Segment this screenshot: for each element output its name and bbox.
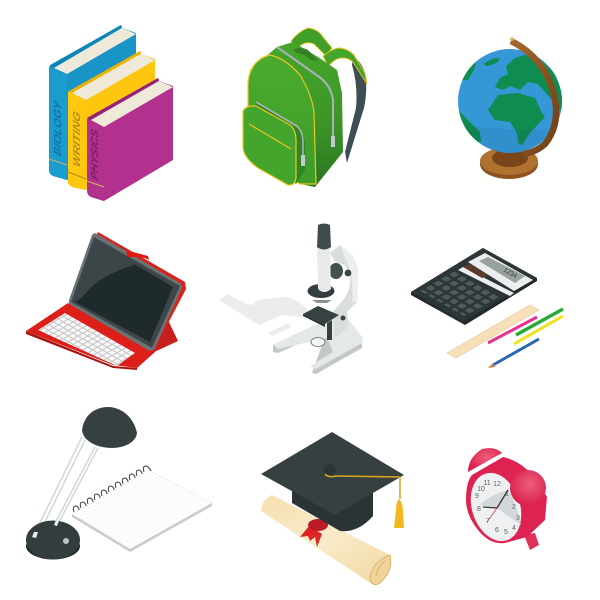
tablet body [69,233,182,351]
spine label: PHYSICS: PHYSICS [90,127,101,182]
revolving nosepiece [308,284,334,298]
blue book [49,25,136,180]
continents [456,55,563,145]
clock face: 11 [483,480,491,487]
purple book [87,78,173,201]
icon: alarm clock [462,448,547,550]
cap board [261,432,404,515]
red keyboard base [26,303,155,368]
clock face: 7 [486,518,490,525]
clock face [462,466,530,548]
clock face: 10 [477,486,485,493]
icon: ruler [447,305,539,358]
arm [330,245,358,338]
notebook spiral [73,466,151,512]
clock face: 1 [505,491,509,498]
clock body [466,457,547,543]
dark back strap [345,56,366,163]
icon: tablet with red keyboard case [26,232,186,370]
spine label: WRITING: WRITING [72,109,83,169]
icon: yellow pencil [514,316,563,344]
yellow book [68,51,155,190]
eyepiece [317,224,331,250]
globe shading [464,126,553,153]
base [273,315,363,374]
clock face: 9 [475,493,479,500]
spine label: BIOLOGY: BIOLOGY [53,98,64,158]
stage [303,306,339,324]
top handle [293,48,318,61]
small bell [468,448,502,472]
icon: globe [456,37,563,179]
top straps [291,28,332,56]
clock face: 4 [512,525,516,532]
lamp button [63,538,69,544]
icon: green pencil [516,309,563,335]
clock hands [483,490,508,508]
big bell [510,470,546,506]
stand flap [140,320,178,353]
lamp base [26,520,80,560]
mirror [311,338,325,346]
tassel cord [325,474,400,499]
clock face: 5 [504,529,508,536]
front panel [248,55,316,184]
microscope shadow [219,294,312,325]
tassel [394,499,404,528]
calculator digits: 1234 [502,267,518,280]
front pocket [243,102,305,185]
clock face: 2 [512,504,516,511]
lamp shade [82,407,137,448]
icon: pink pencil [488,317,537,343]
back cover [96,232,186,352]
clock face: 6 [495,527,499,534]
focus knobs [329,263,343,279]
clock face: 8 [477,506,481,513]
clock face: 12 [493,481,501,488]
icon: books [49,25,173,201]
icon: spiral notebook [72,466,212,552]
foot [524,533,539,550]
red clasp [126,252,149,260]
body and side panel [250,42,343,187]
icon: microscope [219,224,363,374]
clock face: 3 [516,515,520,522]
icon: calculator [411,248,537,325]
icon: graduation cap [261,432,404,531]
lamp arms [33,437,98,538]
icon: desk lamp [26,407,137,560]
main zipper [277,47,333,146]
ribbon [300,526,322,547]
tube [317,246,331,292]
wax seal [308,519,328,531]
icon: blue pencil [493,339,539,365]
globe stand base [480,147,538,179]
calculator keys [420,270,502,316]
cap body [292,491,373,531]
globe stand arc [511,41,556,154]
icon: backpack [243,28,367,187]
keyboard keys [38,313,135,366]
icon: diploma scroll [261,495,391,585]
tablet screen [75,242,173,342]
globe sphere [458,49,562,153]
